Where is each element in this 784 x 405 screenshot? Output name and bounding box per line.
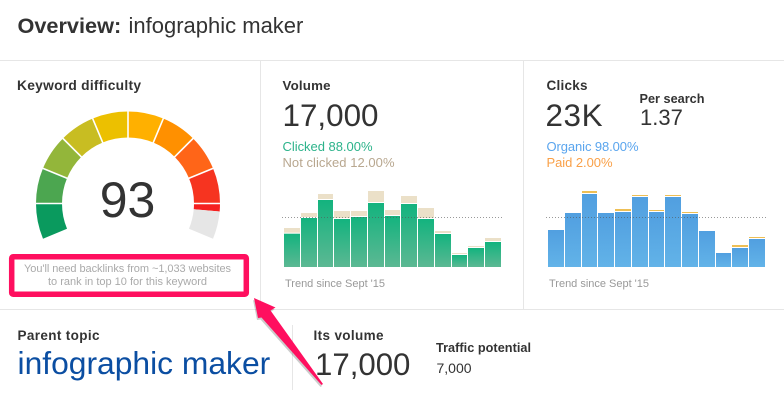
clicks value: 23K	[546, 98, 603, 133]
its volume value: 17,000	[315, 347, 410, 382]
score: 93	[100, 172, 155, 228]
heading: traffic potential: Traffic potential	[436, 341, 531, 355]
not clicked share: Not clicked 12.00%	[282, 155, 395, 170]
volume value: 17,000	[282, 98, 379, 133]
highlight box	[12, 257, 246, 294]
panel: keyword difficulty	[12, 78, 246, 294]
per search value: 1.37	[640, 105, 683, 130]
panel: clicks	[546, 78, 768, 290]
parent topic link: infographic maker	[18, 345, 271, 381]
heading: its volume: Its volume	[314, 328, 384, 343]
traffic potential value: 7,000	[436, 360, 472, 376]
arrow	[253, 298, 323, 387]
trend caption: Trend since Sept '15	[285, 278, 385, 290]
clicked share: Clicked 88.00%	[282, 139, 373, 154]
backlinks note	[24, 263, 232, 288]
gauge	[35, 110, 221, 234]
heading: clicks: Clicks	[546, 78, 588, 93]
panel: its volume	[314, 328, 410, 382]
heading: keyword difficulty: Keyword difficulty	[17, 78, 141, 93]
panel: traffic potential	[436, 341, 531, 376]
heading: parent topic: Parent topic	[18, 328, 100, 343]
trend caption: Trend since Sept '15	[549, 278, 649, 290]
heading: volume: Volume	[282, 78, 330, 93]
panel: parent topic	[18, 328, 271, 381]
backlinks note: to rank in top 10 for this keyword	[48, 276, 207, 288]
title: Overview:	[18, 13, 121, 38]
panel: volume	[282, 78, 504, 290]
paid share: Paid 2.00%	[546, 155, 613, 170]
backlinks note: You'll need backlinks from ~1,033 websites	[24, 263, 232, 275]
bar chart: clicks trend	[546, 191, 768, 267]
organic share: Organic 98.00%	[546, 139, 639, 154]
per search label: Per search	[640, 92, 704, 106]
bar chart: volume trend	[282, 191, 504, 267]
title: infographic maker	[128, 13, 303, 38]
